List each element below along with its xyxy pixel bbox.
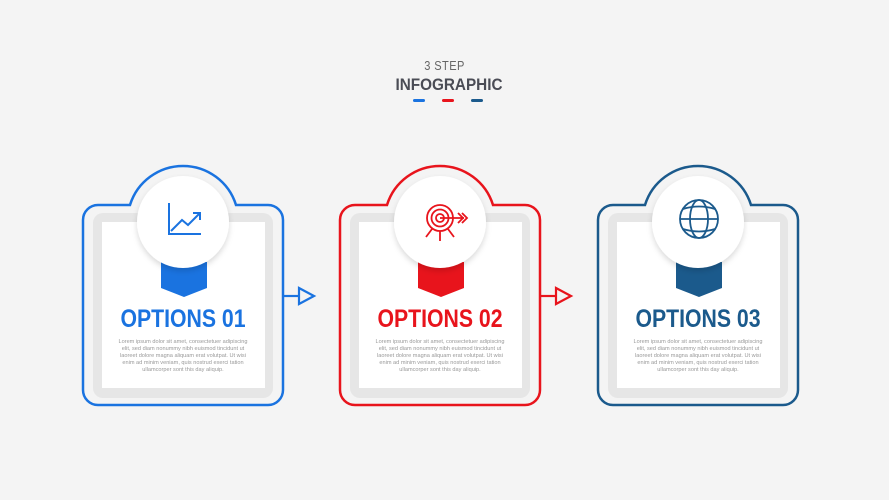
header: title [396,58,503,102]
chevron [418,262,464,297]
body text [118,339,248,373]
body text: Lorem ipsum dolor sit amet, consectetuer adipiscing [118,339,248,345]
heading: OPTIONS 01 [120,304,246,332]
header: title: INFOGRAPHIC [396,75,503,94]
body text: elit, sed diam nonummy nibh euismod tincidunt ut [637,346,760,352]
body text: laoreet dolore magna aliquam erat volutpat. Ut wisi [120,353,246,359]
panel: options 01 [83,166,283,405]
body text: ullamcorper sont this day aliquip. [657,367,739,373]
heading: OPTIONS 03 [635,304,761,332]
body text: Lorem ipsum dolor sit amet, consectetuer adipiscing [375,339,505,345]
body text: elit, sed diam nonummy nibh euismod tincidunt ut [379,346,502,352]
icon circle: globe [652,176,744,268]
arrow 2 [541,288,571,304]
chevron [161,262,207,297]
icon circle: chart [137,176,229,268]
body text: laoreet dolore magna aliquam erat volutpat. Ut wisi [635,353,761,359]
body text [633,339,763,373]
header: title: 3 STEP [424,58,465,73]
arrow 1 [284,288,314,304]
body text: ullamcorper sont this day aliquip. [399,367,481,373]
panel: options 02 [340,166,540,405]
body text: Lorem ipsum dolor sit amet, consectetuer adipiscing [633,339,763,345]
heading: OPTIONS 02 [377,304,503,332]
body text: elit, sed diam nonummy nibh euismod tincidunt ut [122,346,245,352]
chevron [676,262,722,297]
body text: enim ad minim veniam, quis nostrud exerci tation [122,360,244,366]
body text: ullamcorper sont this day aliquip. [142,367,224,373]
body text: enim ad minim veniam, quis nostrud exerci tation [379,360,501,366]
body text: laoreet dolore magna aliquam erat volutpat. Ut wisi [377,353,503,359]
body text [375,339,505,373]
body text: enim ad minim veniam, quis nostrud exerci tation [637,360,759,366]
icon circle: target [394,176,486,268]
panel: options 03 [598,166,798,405]
